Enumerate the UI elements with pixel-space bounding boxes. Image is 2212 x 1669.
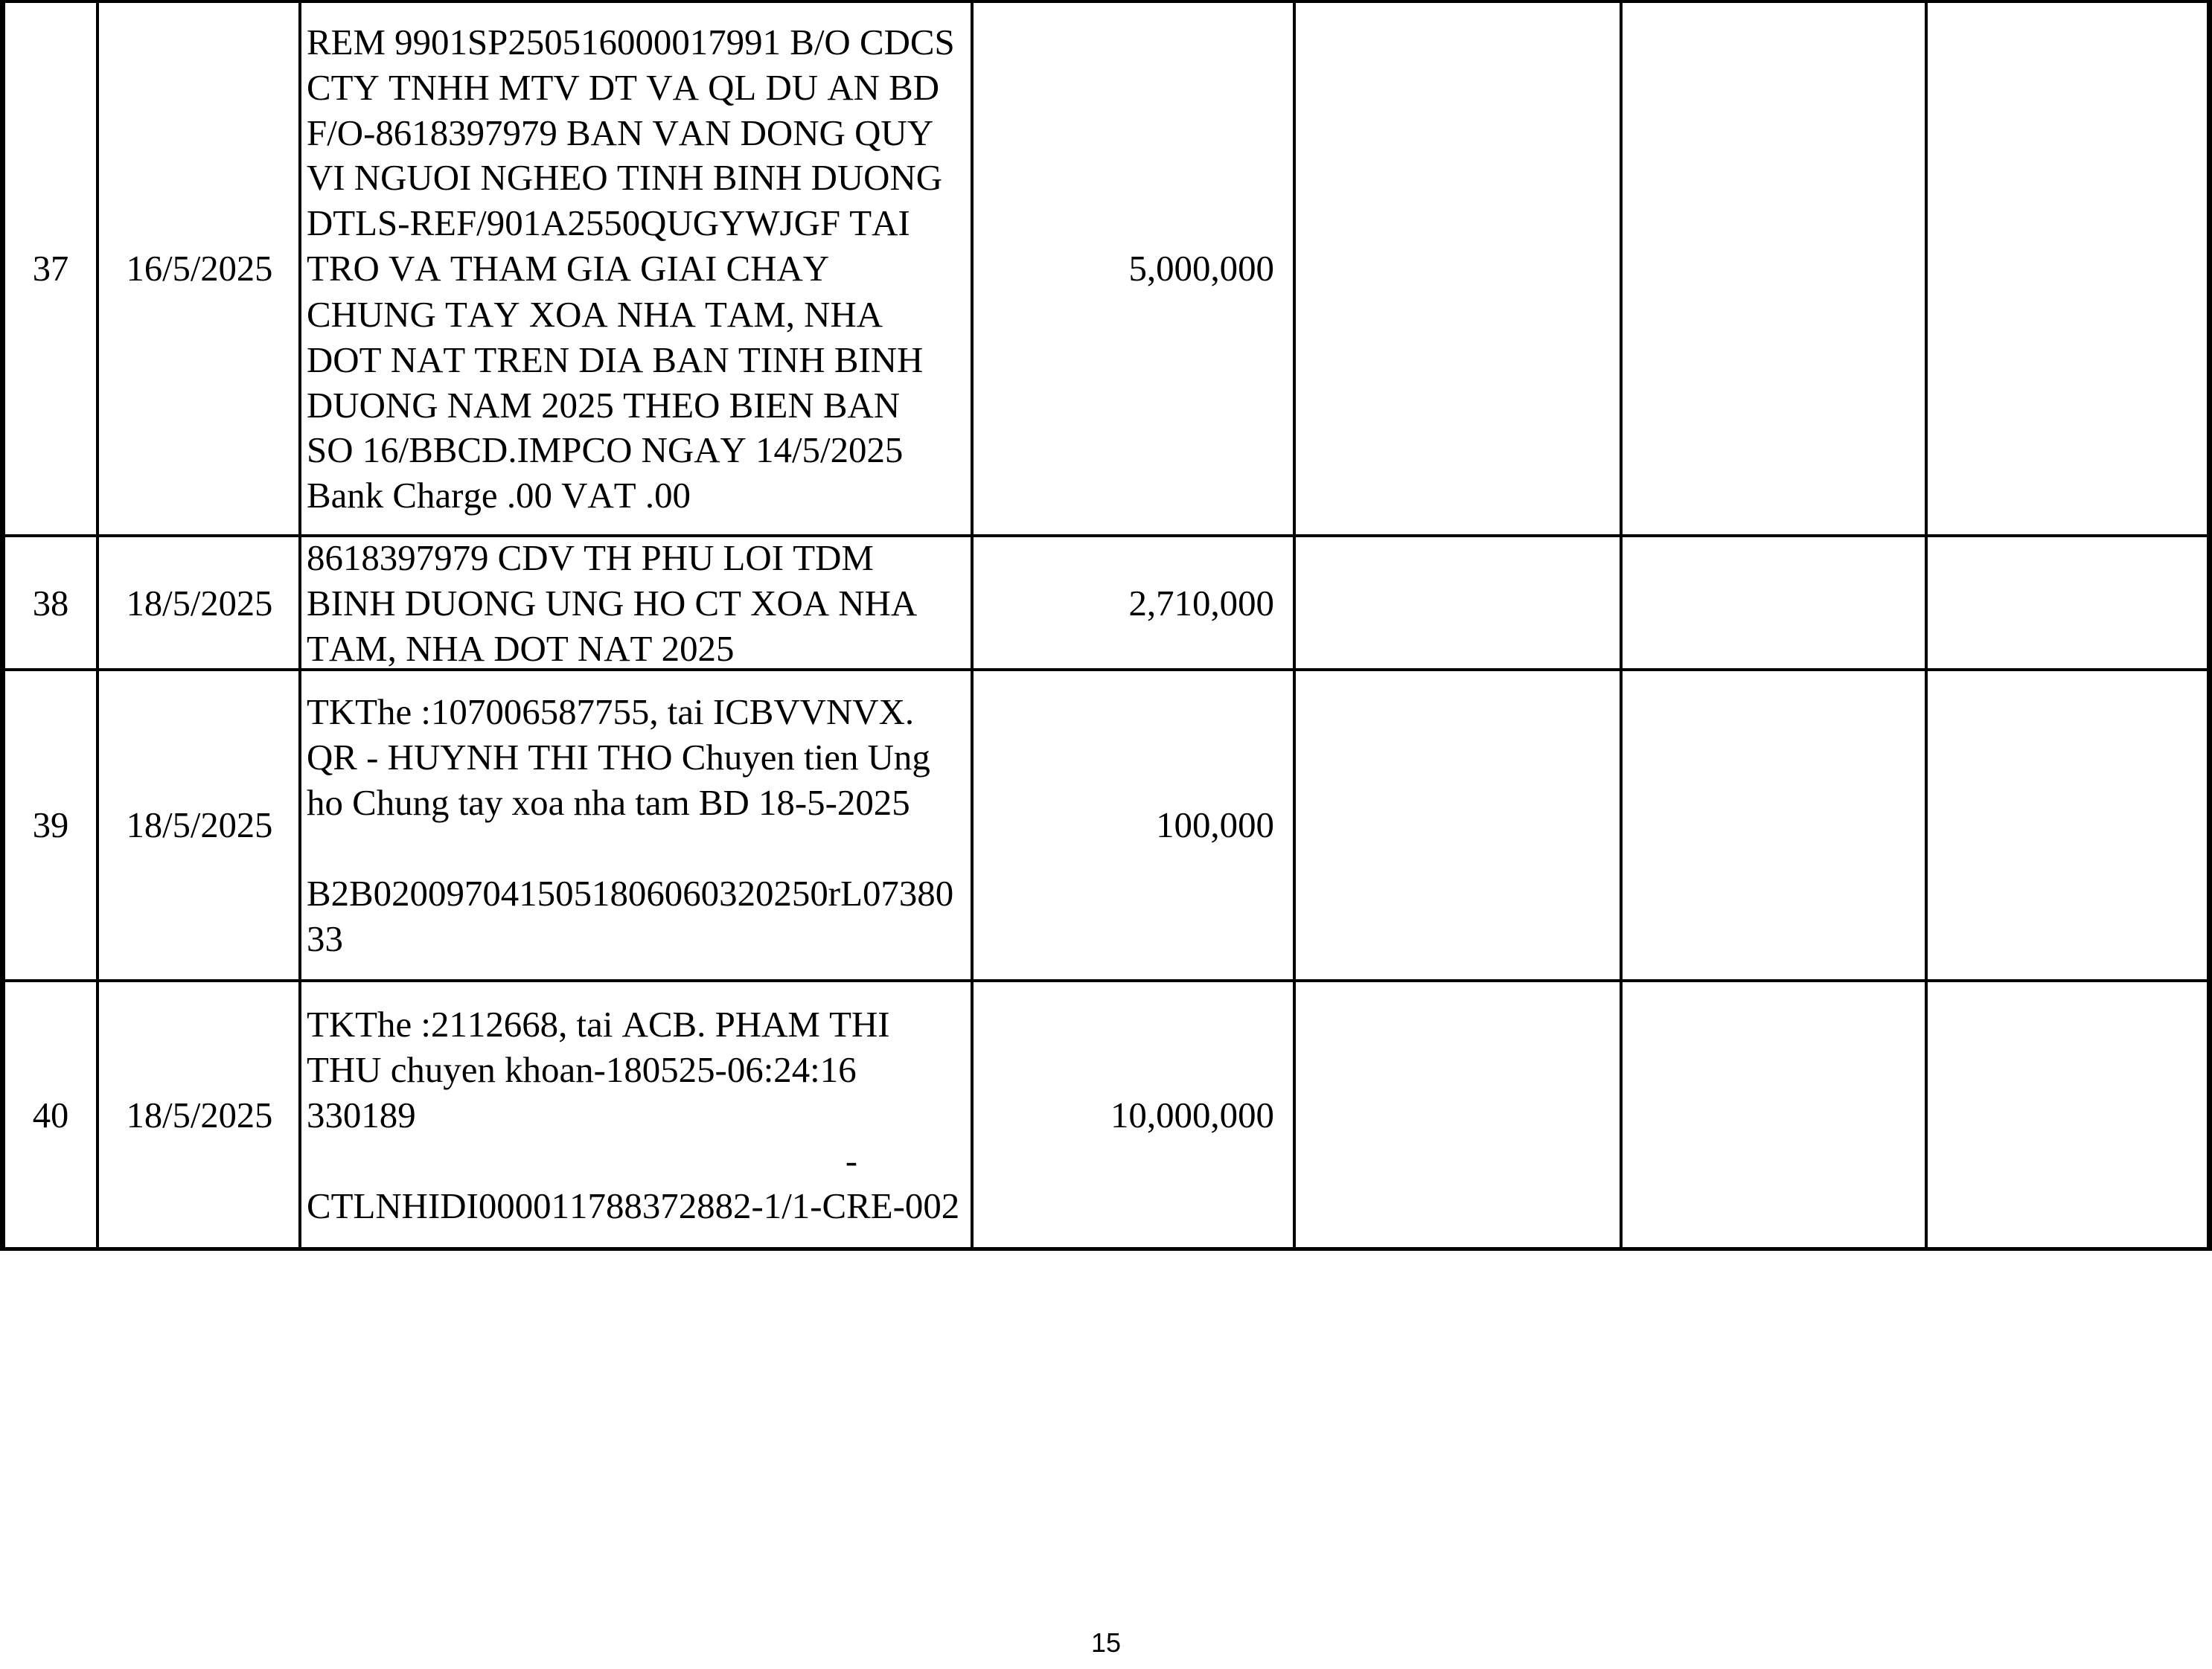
row 37 description: SO 16/BBCD.IMPCO NGAY 14/5/2025 — [307, 429, 903, 470]
row 39 description — [307, 691, 953, 959]
table row 40: 10,000,000 — [1110, 1095, 1274, 1135]
row 37 description: DUONG NAM 2025 THEO BIEN BAN — [307, 385, 900, 426]
table row 39 — [33, 691, 1274, 959]
row 37 description: CHUNG TAY XOA NHA TAM, NHA — [307, 294, 883, 335]
table row 40: 18/5/2025 — [127, 1096, 272, 1135]
row 40 description: 330189 — [307, 1095, 416, 1135]
table row 39: 39 — [33, 806, 68, 845]
table row 37: 5,000,000 — [1128, 248, 1274, 289]
row 40 description: TKThe :2112668, tai ACB. PHAM THI — [307, 1004, 890, 1045]
table row 39: 18/5/2025 — [127, 806, 272, 845]
row 40 description: THU chuyen khoan-180525-06:24:16 — [307, 1049, 857, 1090]
row 37 description — [307, 22, 955, 516]
row 37 description: DTLS-REF/901A2550QUGYWJGF TAI — [307, 202, 910, 243]
row 39 description: TKThe :107006587755, tai ICBVVNVX. — [307, 691, 914, 732]
row 38 description: TAM, NHA DOT NAT 2025 — [307, 628, 734, 669]
table row 39: 100,000 — [1156, 804, 1274, 845]
row 37 description: CTY TNHH MTV DT VA QL DU AN BD — [307, 67, 939, 108]
row 40 description — [307, 1004, 959, 1226]
table row 40 — [33, 1004, 1274, 1226]
row 37 description: REM 9901SP250516000017991 B/O CDCS — [307, 22, 955, 63]
row 38 description — [307, 537, 917, 669]
row 37 description: F/O-8618397979 BAN VAN DONG QUY — [307, 112, 933, 153]
row 39 description: 33 — [307, 918, 343, 959]
row 38 description: 8618397979 CDV TH PHU LOI TDM — [307, 537, 874, 578]
row 39 description: B2B0200970415051806060320250rL07380 — [307, 873, 953, 914]
page number: 15 — [1091, 1627, 1121, 1658]
row 39 description: QR - HUYNH THI THO Chuyen tien Ung — [307, 737, 930, 778]
row 37 description: Bank Charge .00 VAT .00 — [307, 475, 691, 516]
table row 37: 37 — [33, 249, 68, 289]
row 40 description: - — [846, 1141, 857, 1181]
table row 38: 18/5/2025 — [127, 584, 272, 624]
table grid — [0, 0, 2212, 1251]
table row 38 — [33, 537, 1274, 669]
table row 37: 16/5/2025 — [127, 249, 272, 289]
row 39 description: ho Chung tay xoa nha tam BD 18-5-2025 — [307, 782, 910, 823]
row 38 description: BINH DUONG UNG HO CT XOA NHA — [307, 583, 917, 624]
table row 40: 40 — [33, 1096, 68, 1135]
row 40 description: CTLNHIDI000011788372882-1/1-CRE-002 — [307, 1185, 959, 1226]
row 37 description: VI NGUOI NGHEO TINH BINH DUONG — [307, 157, 942, 198]
table row 38: 38 — [33, 584, 68, 624]
table row 38: 2,710,000 — [1128, 583, 1274, 624]
row 37 description: DOT NAT TREN DIA BAN TINH BINH — [307, 339, 923, 380]
table row 37 — [33, 22, 1274, 516]
row 37 description: TRO VA THAM GIA GIAI CHAY — [307, 248, 829, 289]
